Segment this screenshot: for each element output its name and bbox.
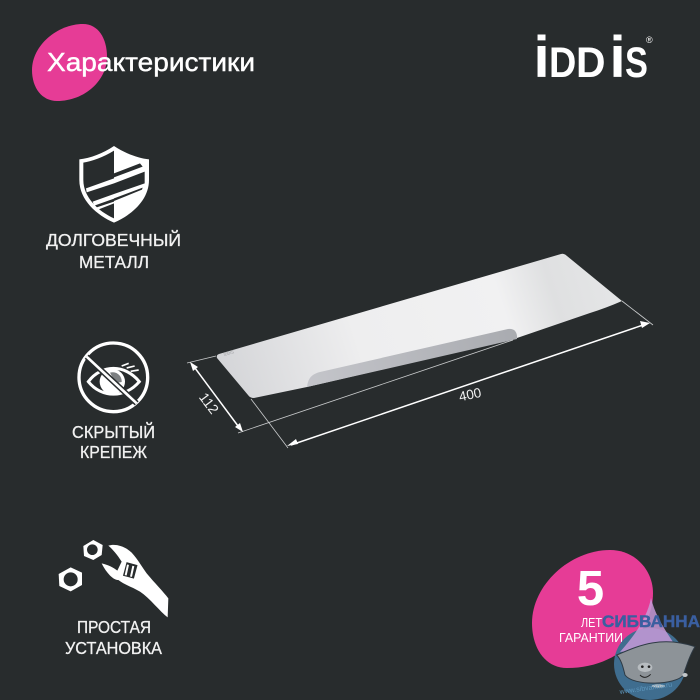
- watermark: blue circle: [614, 628, 686, 700]
- label: durable metal: МЕТАЛЛ: [79, 252, 149, 272]
- feature: hidden fastening: [72, 343, 155, 462]
- label: easy installation: [65, 617, 162, 658]
- dimension: length 400: [287, 301, 653, 446]
- logo: iDDiS: ®: [646, 35, 653, 45]
- recessed handle: [307, 329, 517, 387]
- label: easy installation: УСТАНОВКА: [65, 638, 162, 658]
- logo: iDDiS: D: [576, 38, 605, 86]
- shelf product: [217, 254, 622, 398]
- label: hidden fastening: СКРЫТЫЙ: [72, 421, 155, 442]
- icon: crossed-out eye: [79, 343, 148, 412]
- feature: easy installation: [59, 540, 168, 658]
- logo: iDDiS: D: [549, 38, 576, 87]
- dimension: width 112: 112: [196, 389, 222, 417]
- dimension: length 400: 400: [457, 385, 483, 404]
- dimension: width 112: [187, 340, 513, 448]
- icon: wrench and nuts: [59, 540, 168, 617]
- logo: iDDiS: [534, 25, 653, 90]
- warranty badge: ГАРАНТИИ: [559, 630, 623, 645]
- watermark: droplet: [620, 598, 675, 652]
- label: easy installation: ПРОСТАЯ: [77, 617, 151, 637]
- warranty badge: [532, 550, 653, 668]
- heading: characteristics: [32, 24, 255, 101]
- logo: iDDiS: i: [534, 25, 550, 90]
- label: durable metal: [46, 229, 181, 272]
- icon: shield: [79, 146, 149, 223]
- watermark: bathtub: [617, 642, 695, 688]
- watermark: brand name: СИБВАННА: [602, 613, 700, 631]
- label: hidden fastening: [72, 421, 155, 462]
- logo: iDDiS: i: [610, 25, 626, 90]
- label: hidden fastening: КРЕПЕЖ: [80, 442, 147, 462]
- heading: characteristics: Характеристики: [47, 47, 255, 77]
- engraved brand mark: IDDIS: [223, 349, 235, 357]
- feature: durable metal: [46, 146, 181, 272]
- watermark: url: www.sibvanna.ru: [618, 682, 673, 696]
- warranty badge: 5: [577, 562, 604, 616]
- warranty badge: ЛЕТ: [581, 615, 602, 630]
- label: durable metal: ДОЛГОВЕЧНЫЙ: [46, 229, 181, 250]
- logo: iDDiS: S: [625, 39, 648, 87]
- watermark: [602, 598, 700, 700]
